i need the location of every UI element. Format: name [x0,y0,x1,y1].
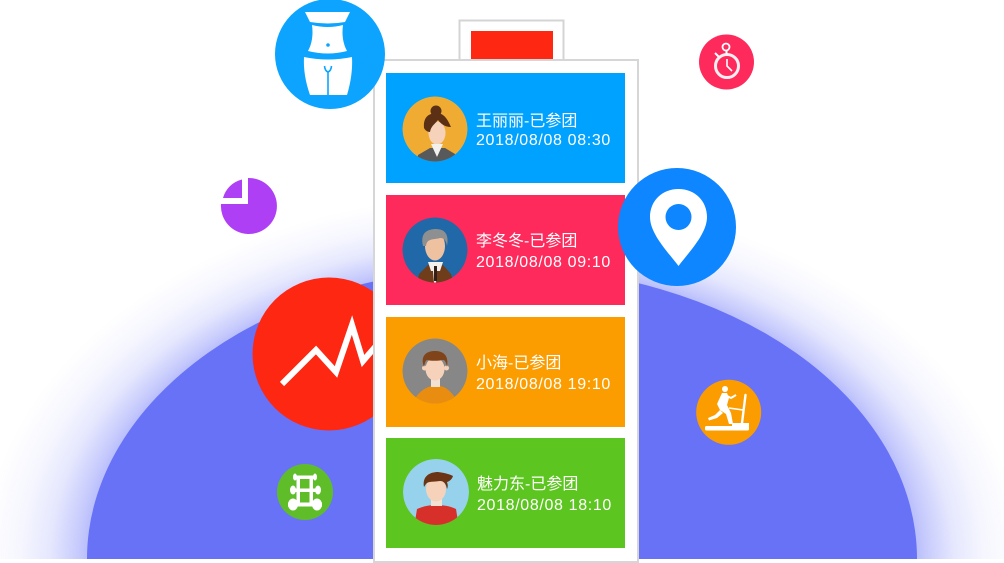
date: 2018/08/08 09:10 [476,254,611,271]
avatar: man in red [403,459,469,528]
icon: treadmill circle [696,380,761,445]
icon: body waist circle [275,0,385,109]
card: 魅力东 [386,438,625,548]
name: 魅力东-已参团 [477,475,578,493]
battery-shaped panel [374,20,638,562]
background dome with glow [0,190,1004,559]
panel body [374,60,638,562]
icon: red trend line circle [252,278,373,430]
icon: barbell ladder circle [277,464,333,520]
avatar: older man [402,218,468,285]
date: 2018/08/08 19:10 [476,376,611,393]
card: 李冬冬 [386,195,625,305]
name: 李冬冬-已参团 [476,232,577,250]
avatar: young man [402,338,468,405]
date: 2018/08/08 18:10 [477,497,612,514]
name: 小海-已参团 [476,354,561,372]
icon: pie chart [221,178,277,234]
battery cap with red charge [460,20,564,62]
avatar: woman [402,96,468,165]
icon: location pin circle [618,168,736,286]
date: 2018/08/08 08:30 [476,132,611,149]
card: 王丽丽 [386,73,625,183]
card: 小海 [386,317,625,427]
name: 王丽丽-已参团 [476,112,577,130]
icon: stopwatch circle [699,34,754,90]
